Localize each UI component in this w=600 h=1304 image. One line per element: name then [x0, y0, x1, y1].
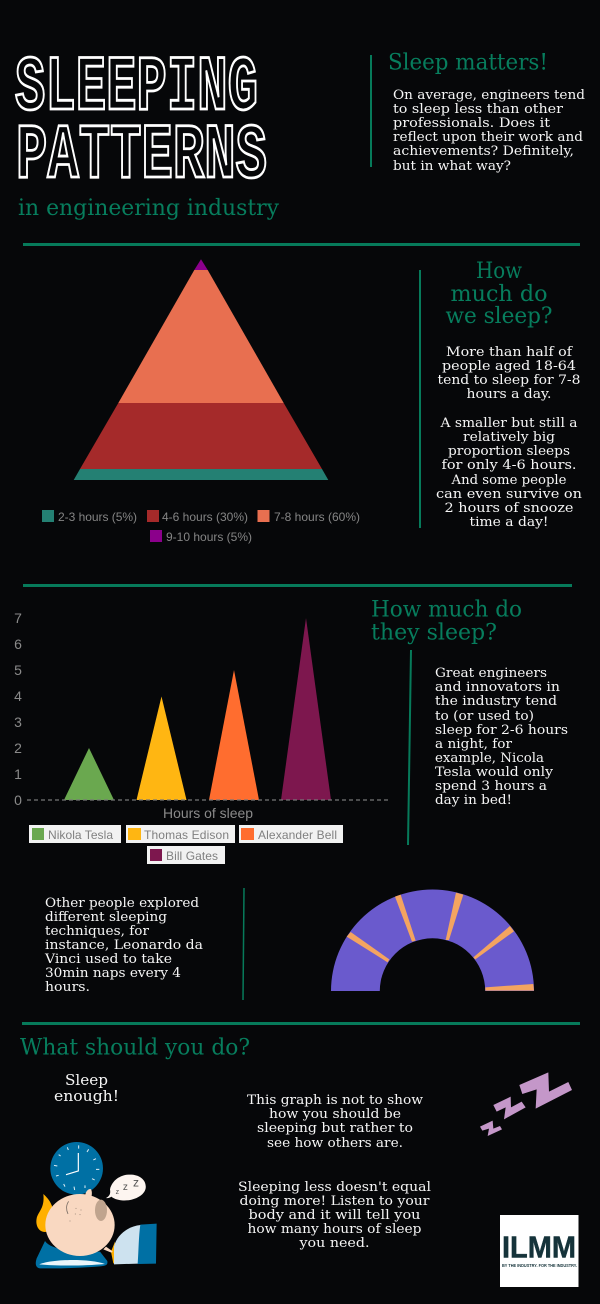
bar chart legend: Thomas Edison	[144, 828, 229, 842]
bar chart legend: Alexander Bell	[258, 828, 337, 842]
text: other people: instance, Leonardo da	[45, 937, 204, 952]
icon: speech bubble: z	[123, 1182, 128, 1193]
heading: how much do they sleep: they sleep?	[371, 620, 497, 646]
bar chart	[14, 610, 390, 821]
pyramid legend: 9-10 hours (5%)	[166, 530, 252, 544]
text: other people	[44, 895, 204, 994]
title: PATTERNS	[16, 113, 267, 201]
text: how much do we sleep: hours a day.	[466, 386, 552, 401]
icon: pillow	[36, 1241, 107, 1268]
subtitle: in engineering industry	[18, 196, 280, 221]
heading: how much do we sleep: much do	[450, 282, 548, 307]
title	[15, 45, 267, 201]
text: great engineers: example, Nicola	[435, 750, 545, 765]
pyramid legend	[42, 510, 360, 544]
heading: how much do they sleep: How much do	[371, 598, 522, 622]
text: other people: different sleeping	[45, 909, 167, 924]
heading: how much do we sleep: we sleep?	[446, 304, 552, 329]
icon: foot	[111, 1242, 115, 1263]
pyramid chart	[74, 259, 328, 480]
text: this graph: how you should be	[269, 1106, 401, 1121]
bar chart: 7	[14, 610, 22, 626]
text: how much do we sleep: time a day!	[470, 514, 548, 529]
bar chart: 5	[14, 662, 22, 678]
icon: head	[45, 1189, 115, 1256]
intro text	[393, 87, 585, 173]
intro text: achievements? Definitely,	[393, 143, 574, 158]
intro text: to sleep less than other	[393, 101, 564, 116]
text: how much do we sleep: for only 4-6 hours.	[442, 457, 576, 472]
icon: clock	[50, 1142, 103, 1195]
text: how much do we sleep: tend to sleep for 7-8	[438, 372, 580, 387]
text: how much do we sleep: can even survive on	[436, 486, 582, 501]
bar chart: Hours of sleep	[163, 806, 253, 821]
bar chart: 4	[14, 688, 22, 704]
text: this graph: sleeping but rather to	[257, 1120, 413, 1135]
logo: ILMM: BY THE INDUSTRY. FOR THE INDUSTRY.	[502, 1263, 577, 1268]
bar chart: 0	[14, 792, 22, 808]
text: this graph: see how others are.	[267, 1135, 403, 1150]
text: great engineers: day in bed!	[435, 792, 512, 807]
text: how much do we sleep	[436, 344, 582, 529]
icon: hair	[36, 1194, 53, 1232]
text: great engineers: and innovators in	[435, 679, 560, 694]
text: other people: 30min naps every 4	[45, 965, 181, 980]
text: great engineers: sleep for 2-6 hours	[435, 722, 568, 737]
text: great engineers: spend 3 hours a	[435, 778, 548, 793]
text: this graph	[247, 1092, 423, 1150]
bar chart legend: Bill Gates	[166, 849, 218, 863]
heading: how much do we sleep	[446, 259, 552, 329]
title: SLEEPING	[15, 45, 258, 133]
bar chart legend	[29, 825, 343, 864]
icon: speech bubble: z	[133, 1176, 139, 1190]
text: sleep enough: enough!	[54, 1087, 119, 1105]
intro divider	[370, 55, 372, 167]
text: how much do we sleep: A smaller but still a	[439, 415, 578, 430]
text: sleep enough	[54, 1071, 119, 1105]
icon: speech bubble	[106, 1175, 146, 1200]
bar chart: 6	[14, 636, 22, 652]
text: great engineers	[435, 665, 568, 807]
icon: blanket	[114, 1224, 157, 1264]
text: how much do we sleep: And some people	[450, 472, 566, 487]
text: sleeping less: Sleeping less doesn't equal	[238, 1179, 431, 1194]
text: sleeping less	[238, 1179, 431, 1250]
text: how much do we sleep: relatively big	[463, 429, 555, 444]
heading: sleep matters: Sleep matters!	[388, 50, 548, 76]
intro text: professionals. Does it	[393, 115, 550, 130]
pyramid legend: 2-3 hours (5%)	[58, 510, 137, 524]
text: how much do we sleep: people aged 18-64	[442, 358, 576, 373]
bar chart legend: Nikola Tesla	[48, 828, 113, 842]
text: great engineers: to (or used to)	[435, 708, 534, 723]
heading: how much do they sleep	[371, 598, 522, 646]
pyramid legend: 4-6 hours (30%)	[162, 510, 248, 524]
text: this graph: This graph is not to show	[247, 1092, 423, 1107]
text: other people: Vinci used to take	[44, 951, 172, 966]
intro text: reflect upon their work and	[393, 129, 583, 144]
text: sleep enough: Sleep	[65, 1071, 108, 1089]
text: other people: hours.	[45, 979, 90, 994]
pyramid legend: 7-8 hours (60%)	[274, 510, 360, 524]
intro text: but in what way?	[393, 158, 511, 173]
bar chart: 3	[14, 714, 22, 730]
text: other people: Other people explored	[45, 895, 199, 910]
heading: how much do we sleep: How	[476, 259, 522, 284]
logo: ILMM: ILMM	[502, 1230, 576, 1264]
text: sleeping less: you need.	[298, 1235, 370, 1250]
text: how much do we sleep: proportion sleeps	[448, 443, 570, 458]
text: how much do we sleep: More than half of	[446, 344, 574, 359]
text: how much do we sleep: 2 hours of snooze	[444, 500, 574, 515]
text: great engineers: Tesla would only	[435, 764, 554, 779]
bar chart: 2	[14, 740, 22, 756]
icon: zzz	[480, 1072, 572, 1136]
heading: what should you do: What should you do?	[20, 1036, 250, 1060]
icon: sleeping person with clock	[36, 1142, 157, 1268]
logo: ILMM	[500, 1215, 578, 1287]
bar chart: 1	[14, 766, 22, 782]
text: sleeping less: doing more! Listen to your	[240, 1193, 431, 1208]
semi-donut chart	[331, 890, 534, 991]
text: sleeping less: body and it will tell you	[248, 1207, 420, 1222]
intro text: On average, engineers tend	[393, 87, 585, 102]
text: sleeping less: how many hours of sleep	[248, 1221, 422, 1236]
text: great engineers: the industry tend	[435, 693, 557, 708]
text: great engineers: Great engineers	[435, 665, 547, 680]
text: other people: techniques, for	[45, 923, 150, 938]
icon: speech bubble: z	[116, 1189, 120, 1196]
text: great engineers: a night, for	[435, 736, 513, 751]
